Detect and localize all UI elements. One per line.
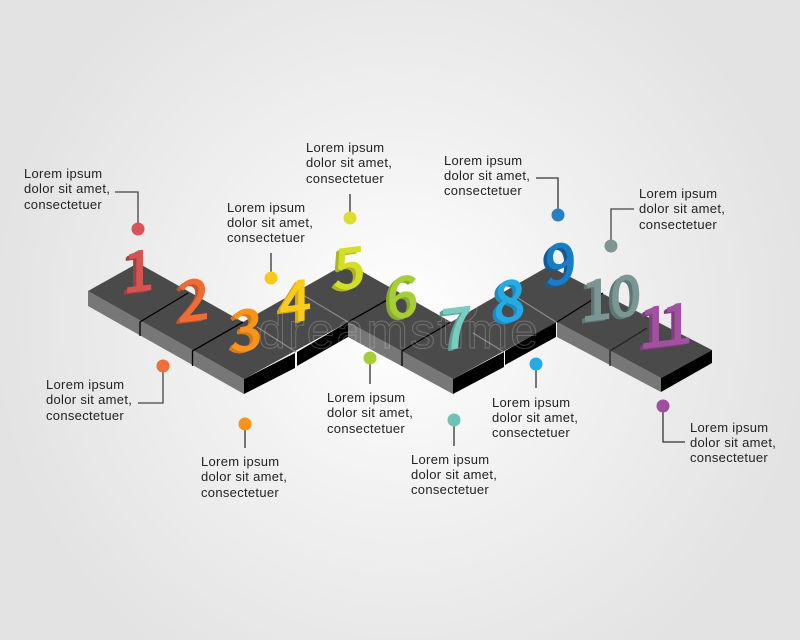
callout 10: Lorem ipsum xyxy=(639,186,717,201)
callout 1 xyxy=(24,166,144,236)
top surface xyxy=(88,263,712,379)
callout 1: consectetuer xyxy=(24,197,102,212)
zigzag isometric platform xyxy=(88,263,712,394)
number 8: 8 xyxy=(494,255,525,340)
callout 6: Lorem ipsum xyxy=(327,390,405,405)
callout 5: dolor sit amet, xyxy=(306,155,392,170)
callout 4: consectetuer xyxy=(227,230,305,245)
callout 9: consectetuer xyxy=(444,183,522,198)
callout 10: consectetuer xyxy=(639,217,717,232)
number 4: 4 xyxy=(280,255,311,340)
callout 7: consectetuer xyxy=(411,482,489,497)
callout 8: dolor sit amet, xyxy=(492,410,578,425)
callout 5: consectetuer xyxy=(306,171,384,186)
callout 11: dolor sit amet, xyxy=(690,435,776,450)
callout 3: dolor sit amet, xyxy=(201,469,287,484)
block divider lines xyxy=(140,293,647,366)
callout 5 xyxy=(306,140,392,224)
callout 7: dolor sit amet, xyxy=(411,467,497,482)
callout 2: Lorem ipsum xyxy=(46,377,124,392)
callout 11: Lorem ipsum xyxy=(690,420,768,435)
number 3: 3 xyxy=(231,284,262,369)
callout 4 xyxy=(227,200,313,284)
number 2: 2 xyxy=(178,254,209,339)
number 10: 10 xyxy=(581,250,639,339)
callout 11: consectetuer xyxy=(690,450,768,465)
callout 9 xyxy=(444,153,564,222)
callout 3: Lorem ipsum xyxy=(201,454,279,469)
callout 3: consectetuer xyxy=(201,485,279,500)
number 7: 7 xyxy=(441,282,472,367)
number 1: 1 xyxy=(123,225,154,310)
number 5: 5 xyxy=(334,222,365,307)
callout 6 xyxy=(327,352,413,436)
callout 6: dolor sit amet, xyxy=(327,405,413,420)
callout 5: Lorem ipsum xyxy=(306,140,384,155)
callout 7: Lorem ipsum xyxy=(411,452,489,467)
callout 8 xyxy=(492,358,578,440)
block left faces xyxy=(88,291,661,394)
number 11: 11 xyxy=(639,279,683,366)
callout 1: dolor sit amet, xyxy=(24,181,110,196)
callout 9: Lorem ipsum xyxy=(444,153,522,168)
callout 4: Lorem ipsum xyxy=(227,200,305,215)
callout 2: dolor sit amet, xyxy=(46,392,132,407)
block right faces xyxy=(244,322,712,394)
callout 10: dolor sit amet, xyxy=(639,201,725,216)
callout 9: dolor sit amet, xyxy=(444,168,530,183)
callout 2: consectetuer xyxy=(46,408,124,423)
callout 3 xyxy=(201,418,287,500)
callout 1: Lorem ipsum xyxy=(24,166,102,181)
number 9: 9 xyxy=(545,218,576,303)
callout 7 xyxy=(411,414,497,497)
callout 2 xyxy=(46,360,170,423)
callout 10 xyxy=(604,186,725,252)
callout 8: Lorem ipsum xyxy=(492,395,570,410)
callout 11 xyxy=(656,400,776,465)
number 6: 6 xyxy=(387,251,418,336)
callout 8: consectetuer xyxy=(492,425,570,440)
callout 6: consectetuer xyxy=(327,421,405,436)
callout 4: dolor sit amet, xyxy=(227,215,313,230)
watermark: dreamstime xyxy=(258,303,538,359)
